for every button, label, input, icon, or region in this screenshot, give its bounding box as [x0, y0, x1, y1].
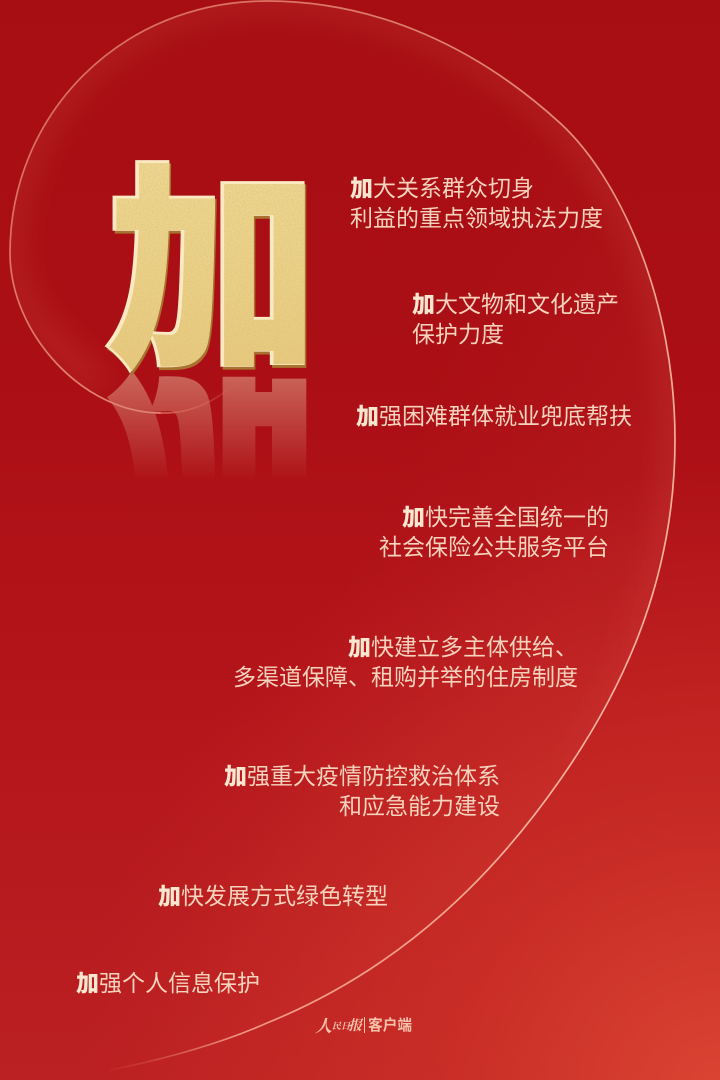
logo: People's Daily client: 客户端: [368, 1014, 412, 1035]
text block 6: [224, 763, 500, 818]
large gold character: 加: [106, 94, 320, 416]
text block 5: 多渠道保障、租购并举的住房制度: [233, 664, 578, 690]
text block 6: 和应急能力建设: [339, 792, 500, 818]
text block 1: 加大关系群众切身: [350, 175, 534, 201]
glass panel inside spiral: [11, 2, 674, 732]
text block 2: 保护力度: [412, 320, 504, 346]
text block 6: 加强重大疫情防控救治体系: [224, 763, 500, 789]
logo: People's Daily client: 人: [315, 1012, 332, 1037]
text block 5: [233, 634, 578, 690]
logo: People's Daily client: [315, 1012, 412, 1037]
text block 1: [350, 175, 603, 230]
logo: People's Daily client: 民: [332, 1019, 341, 1032]
logo: People's Daily client: 报: [348, 1015, 362, 1035]
text block 5: 加快建立多主体供给、: [348, 634, 578, 660]
large gold character: 加: [104, 91, 318, 413]
text block 7: 加快发展方式绿色转型: [158, 883, 388, 909]
text block 2: [412, 291, 619, 346]
text block 2: 加大文物和文化遗产: [412, 291, 619, 317]
reflection of large character: 加: [106, 330, 320, 652]
text block 1: 利益的重点领域执法力度: [350, 204, 603, 230]
logo: People's Daily client: 日: [341, 1019, 350, 1032]
text block 4: [379, 504, 609, 560]
text block 4: 社会保险公共服务平台: [379, 534, 609, 560]
text block 4: 加快完善全国统一的: [402, 504, 609, 530]
text block 3: 加强困难群体就业兜底帮扶: [356, 403, 632, 429]
text block 8: 加强个人信息保护: [76, 970, 260, 996]
large gold character: 加: [106, 92, 320, 414]
